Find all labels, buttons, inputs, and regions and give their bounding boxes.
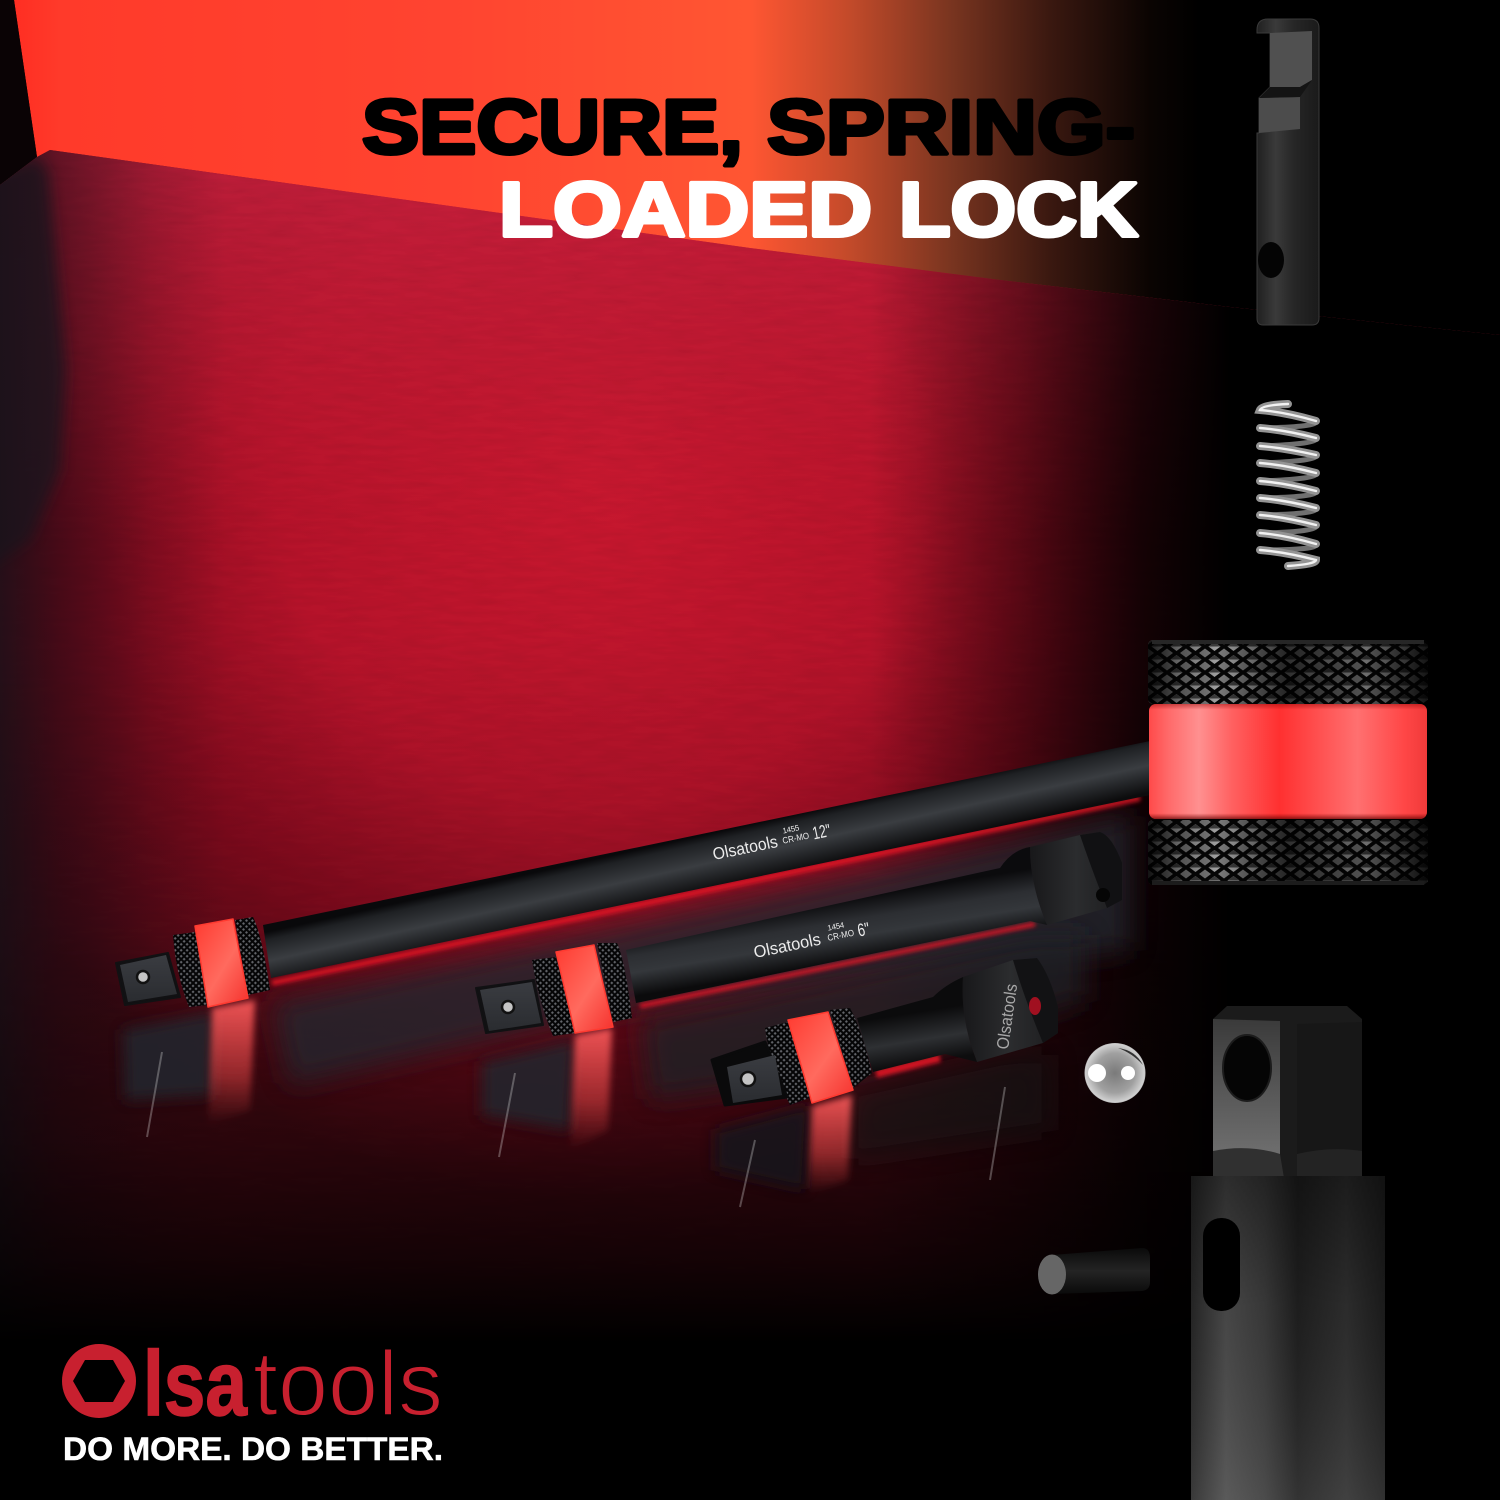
12 inch bar markings: Olsatools: [711, 832, 779, 864]
title: SPRING-: [767, 84, 1135, 170]
part: retaining pin: [1038, 1248, 1150, 1294]
logo: [62, 1333, 443, 1435]
tagline: DO MORE. DO BETTER.: [63, 1431, 443, 1467]
logo: hexagon O mark: [62, 1344, 136, 1418]
12 inch bar markings: [710, 817, 832, 864]
3 inch bar marking: Olsatools: [993, 983, 1021, 1051]
12 inch bar markings: 1455: [782, 823, 801, 836]
background: red wall: [14, 0, 1500, 340]
part: steel ball: [1084, 1043, 1146, 1103]
logo: wordmark bold: lsa: [143, 1333, 248, 1435]
12 inch bar markings: 12": [811, 820, 832, 843]
title: [362, 84, 1138, 253]
background: dark corner: [0, 0, 37, 185]
6 inch bar markings: Olsatools: [752, 930, 822, 962]
3 inch extension bar: [712, 958, 1058, 1105]
background: red floor: [0, 150, 1500, 1310]
title: LOCK: [899, 167, 1138, 253]
title: SECURE,: [362, 84, 743, 170]
12 inch extension bar: [116, 741, 1150, 1007]
6 inch bar markings: 1454: [827, 920, 846, 933]
part: main barrel: [1191, 1176, 1385, 1500]
title: LOADED: [499, 167, 872, 253]
6 inch bar markings: 6": [856, 919, 871, 941]
part: spring-loaded collar top: [1148, 640, 1428, 704]
part: compression spring: [1260, 404, 1316, 566]
part: red collar band: [1149, 704, 1427, 819]
6 inch bar markings: CR-MO: [826, 928, 855, 943]
6 inch extension bar: [476, 832, 1122, 1036]
6 inch bar markings: [751, 916, 871, 962]
part: collar bottom: [1148, 820, 1428, 885]
part: top locking sleeve: [1257, 19, 1319, 325]
floor reflections: [123, 798, 1140, 1207]
12 inch bar markings: CR-MO: [782, 830, 810, 846]
part: square drive hex head: [1213, 1006, 1362, 1178]
logo: wordmark light: tools: [253, 1333, 443, 1435]
